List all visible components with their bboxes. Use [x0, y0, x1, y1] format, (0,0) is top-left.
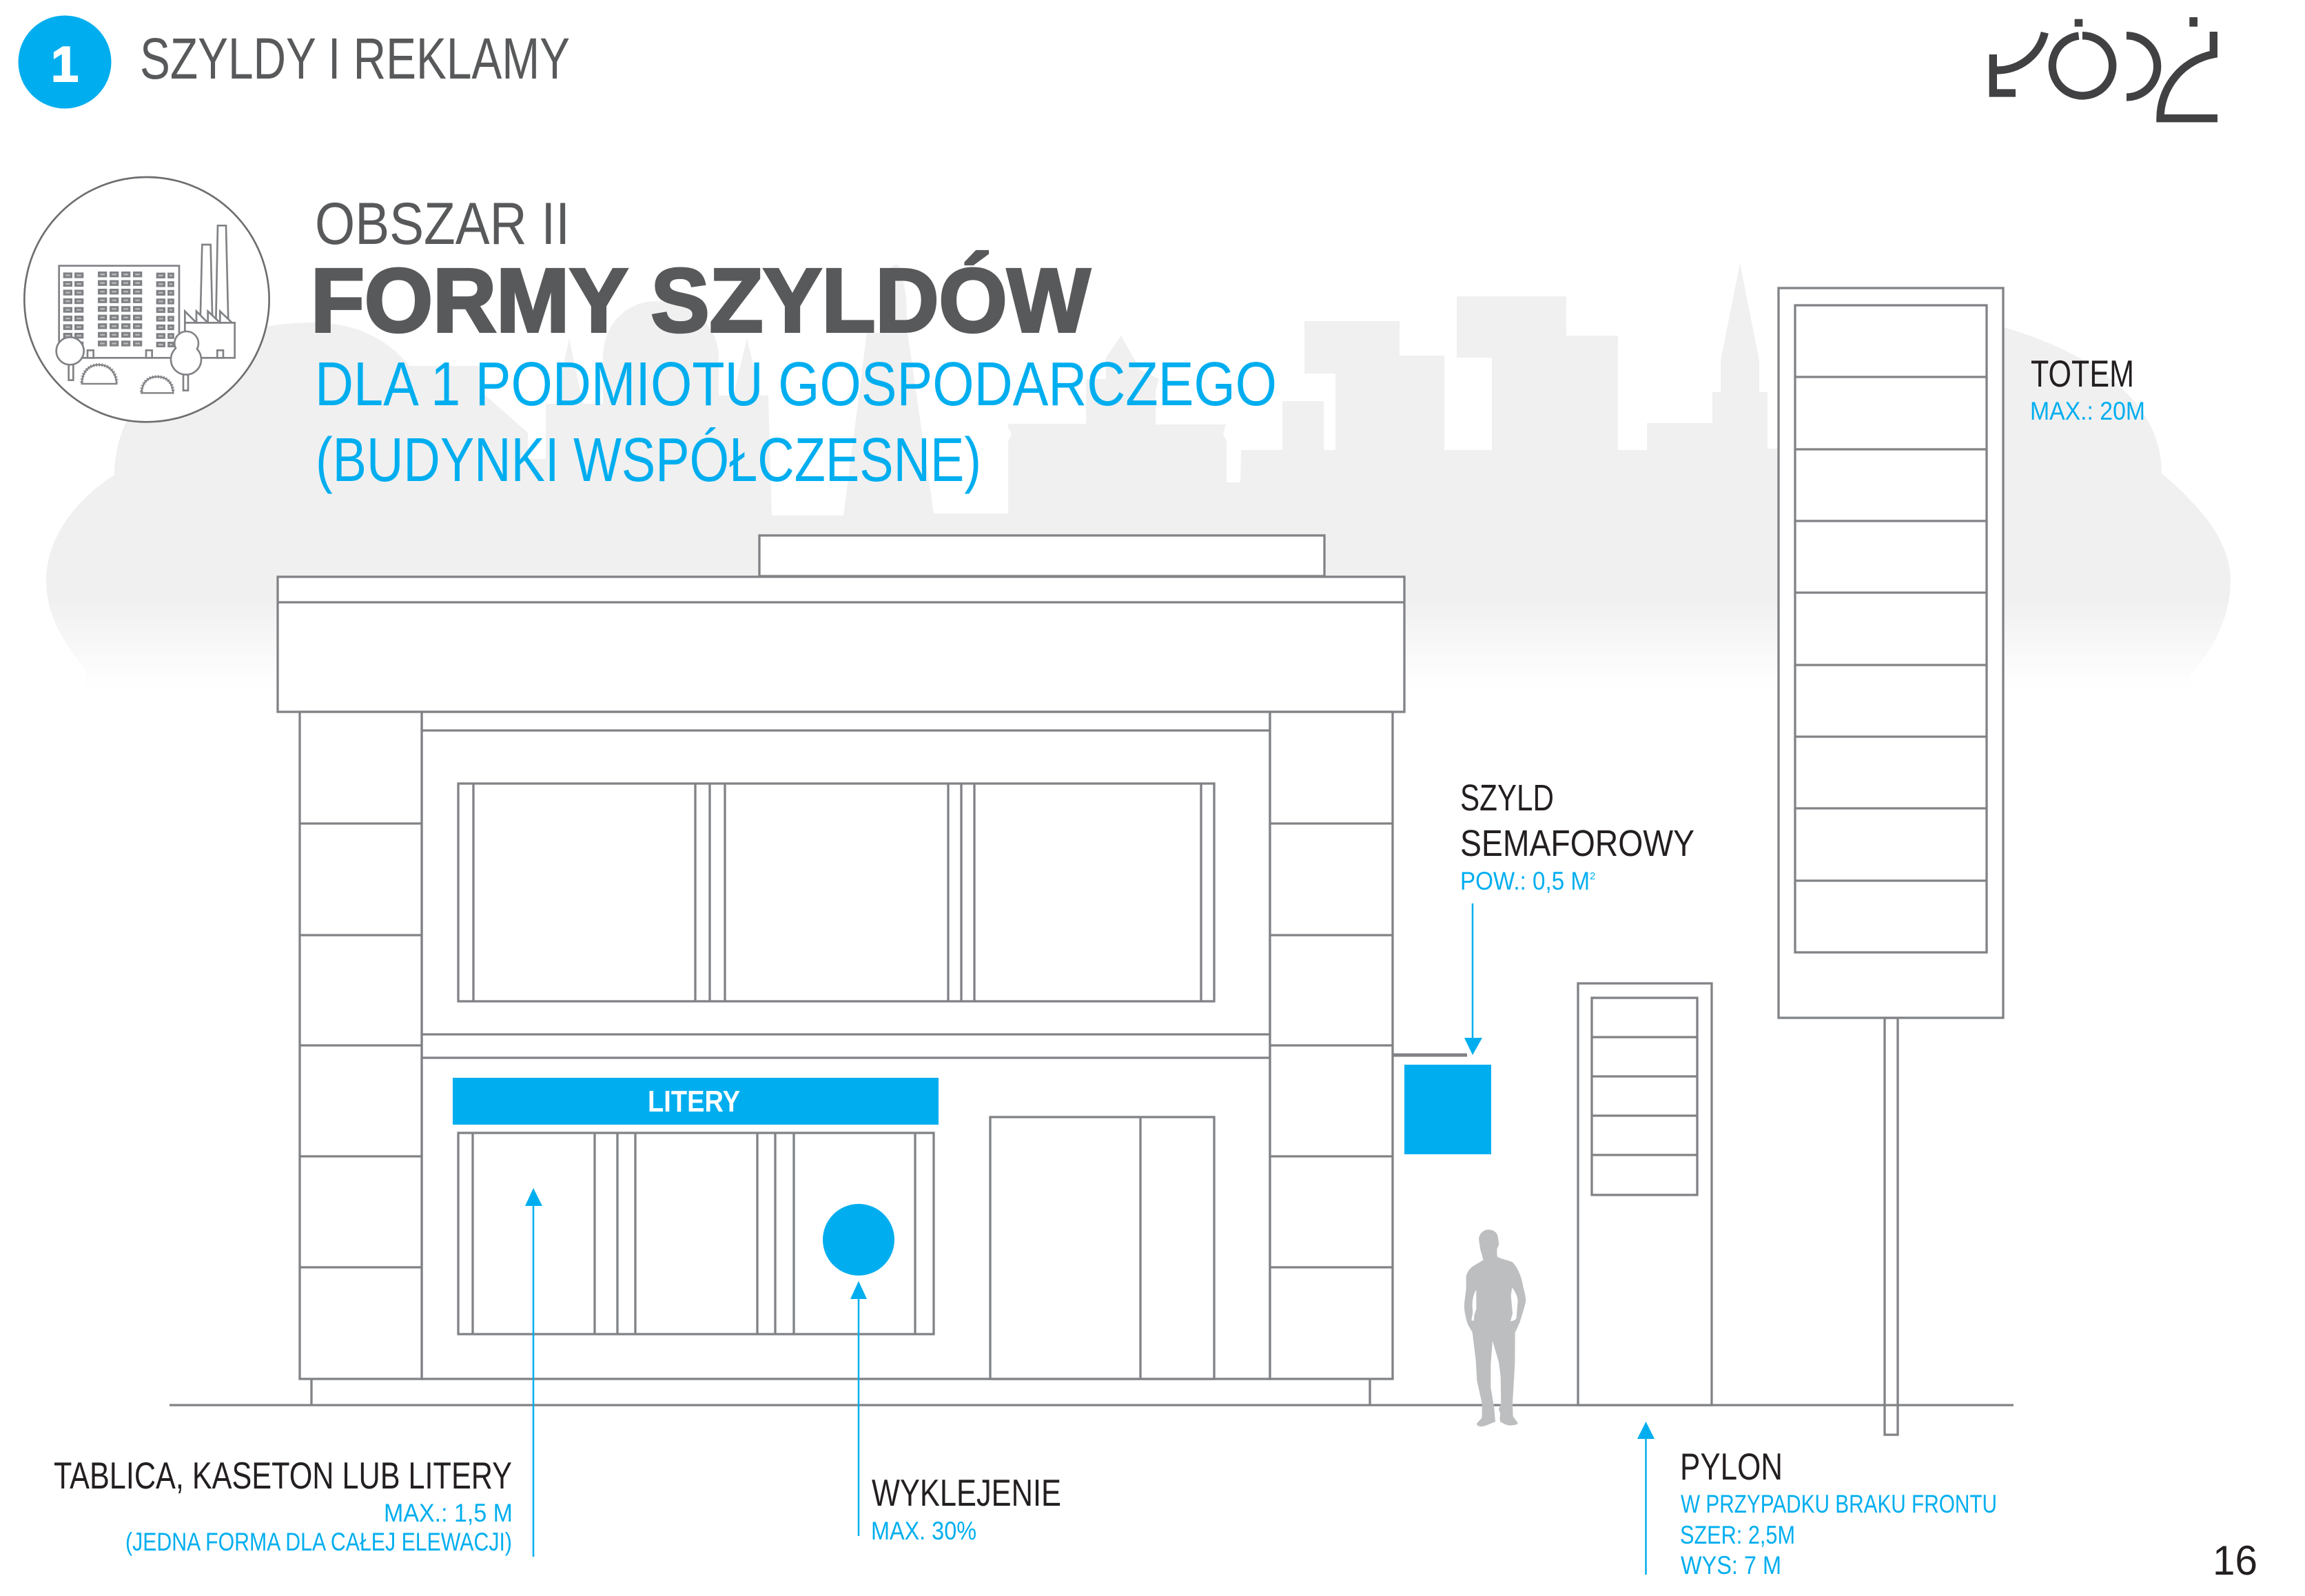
right pilaster: [1270, 712, 1393, 1379]
label: fascia sign: MAX.: 1,5 M: [384, 1499, 513, 1527]
label: projecting sign: [1460, 777, 1694, 895]
page number: 16: [2213, 1537, 2257, 1584]
rooftop box: [759, 535, 1324, 576]
icon: residential block: [59, 266, 179, 358]
label: window sticker: [871, 1471, 1061, 1545]
label: pylon: W PRZYPADKU BRAKU FRONTU: [1681, 1490, 1997, 1518]
label: fascia sign: (JEDNA FORMA DLA CAŁEJ ELEWACJI): [125, 1528, 512, 1556]
floor bands: [422, 730, 1270, 1058]
human silhouette for scale: [1464, 1229, 1526, 1426]
roof cornice: [278, 577, 1404, 712]
heading: subtitle: (BUDYNKI WSPÓŁCZESNE): [316, 426, 981, 495]
label: projecting sign: SEMAFOROWY: [1460, 823, 1694, 864]
arrow: window sticker: [850, 1281, 867, 1536]
background: city skyline cloud silhouette: [46, 263, 2231, 689]
icon: area II housing block and factory in a circle: [24, 177, 269, 422]
upper floor window: [458, 784, 1214, 1001]
logo: Łódź: [1993, 17, 2217, 119]
label: pylon: [1680, 1445, 1997, 1579]
ground line: [170, 1404, 2014, 1406]
ground floor shop window: [458, 1133, 934, 1334]
pylon: [1578, 983, 1712, 1405]
arrow: pylon: [1637, 1422, 1655, 1575]
label: totem: [2030, 352, 2145, 425]
label: projecting sign: POW.: 0,5 M: [1460, 867, 1590, 895]
label: totem: MAX.: 20M: [2030, 397, 2145, 425]
wall body: [422, 712, 1270, 1379]
sign: LITERY fascia: [453, 1078, 939, 1125]
section number badge: [18, 15, 112, 109]
left pilaster: [300, 712, 422, 1379]
label: pylon: SZER: 2,5M: [1680, 1521, 1795, 1549]
heading: subtitle: DLA 1 PODMIOTU GOSPODARCZEGO: [315, 350, 1277, 419]
label: pylon: WYS: 7 M: [1681, 1551, 1781, 1579]
totem: [1779, 288, 2003, 1435]
label: pylon: PYLON: [1680, 1445, 1783, 1488]
heading: area label: OBSZAR II: [315, 191, 570, 257]
projecting sign: [1393, 1055, 1491, 1154]
plinth: [311, 1379, 1370, 1405]
heading: subtitle: [315, 350, 1277, 495]
arrow: projecting sign: [1464, 903, 1482, 1055]
label: window sticker: MAX. 30%: [871, 1517, 976, 1545]
heading: main title: FORMY SZYLDÓW: [311, 249, 1090, 351]
building facade: [278, 535, 1404, 1405]
section number badge: 1: [51, 37, 79, 92]
label: projecting sign: SZYLD: [1460, 777, 1554, 819]
label: fascia sign: TABLICA, KASETON LUB LITERY: [54, 1454, 512, 1497]
label: totem: TOTEM: [2031, 352, 2134, 395]
icon: trees and bushes: [57, 331, 201, 393]
label: window sticker: WYKLEJENIE: [872, 1471, 1061, 1514]
entrance door: [990, 1117, 1214, 1379]
label: projecting sign: 2: [1590, 870, 1595, 882]
window sticker circle: [823, 1204, 894, 1276]
section title: SZYLDY I REKLAMY: [140, 26, 570, 91]
label: fascia sign: [54, 1454, 513, 1556]
arrow: fascia sign: [525, 1188, 542, 1557]
sign: LITERY fascia: LITERY: [648, 1085, 740, 1118]
icon: chimneys and factory hall: [185, 225, 235, 358]
